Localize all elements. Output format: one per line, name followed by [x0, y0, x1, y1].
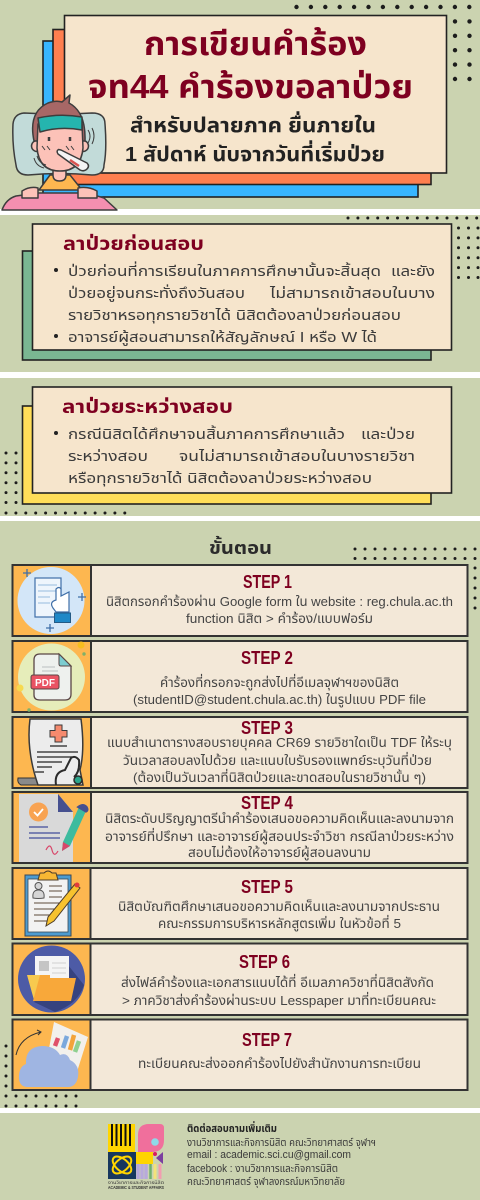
bullet list: จนไม่สามารถเข้าสอบในบางรายวิชา	[179, 448, 415, 465]
panel: step 5	[12, 868, 468, 939]
bullet list: ป่วยอยู่จนกระทั่งถึงวันสอบ	[68, 284, 245, 302]
panel: step 7	[12, 1020, 468, 1090]
title: การเขียนคำร้อง	[144, 25, 367, 62]
hair	[33, 95, 85, 141]
panel: step 2	[12, 641, 468, 712]
worried eyes	[49, 137, 70, 141]
logo: academic and student affairs: ACADEMIC & STUDENT AFFAIRS	[108, 1185, 164, 1190]
blanket	[2, 193, 117, 210]
panel: step 6	[12, 944, 468, 1015]
step description: ทะเบียนคณะส่งออกคำร้องไปยังสำนักงานการทะเบียน	[138, 1056, 421, 1071]
icon: clipboard and pencil	[25, 871, 80, 936]
bullet list: และยัง	[391, 264, 435, 280]
panel: header title card	[43, 16, 446, 197]
bullet list: ระหว่างสอบ	[68, 448, 148, 465]
ears	[32, 140, 42, 152]
step title: STEP 2	[241, 648, 293, 668]
step description	[106, 594, 453, 626]
title	[88, 25, 413, 105]
step description: function นิสิต > คำร้อง/แบบฟอร์ม	[186, 611, 373, 626]
title: จท44 คำร้องขอลาป่วย	[88, 68, 413, 105]
panel: step 4	[12, 792, 468, 863]
cheek marks	[42, 146, 74, 150]
bullet list: และป่วย	[361, 426, 415, 443]
step description: นิสิตระดับปริญญาตรีนำคำร้องเสนอขอความคิดเห็นและลงนามจาก	[105, 811, 454, 826]
step description: วันเวลาสอบลงไปด้วย และแนบใบรับรองแพทย์ระบุวันที่ป่วย	[123, 751, 432, 768]
blue back sheet	[43, 41, 418, 197]
step title: STEP 6	[239, 952, 290, 972]
footer contact text: email : academic.sci.cu@gmail.com	[187, 1149, 351, 1161]
panel: sick leave during exam	[22, 387, 452, 504]
bullet list: อาจารย์ผู้สอนสามารถให้สัญลักษณ์ I หรือ W ได้	[68, 330, 377, 346]
step title: STEP 4	[241, 793, 293, 813]
heading: ลาป่วยระหว่างสอบ	[62, 396, 233, 418]
panel: sick leave before exam	[22, 224, 452, 360]
shirt	[39, 175, 82, 190]
cream front sheet	[32, 224, 452, 350]
step description: คณะกรรมการบริหารหลักสูตรเพิ่ม ในหัวข้อที่ 5	[158, 914, 401, 931]
shiver marks	[88, 128, 94, 144]
forehead towel	[38, 115, 82, 132]
cream front sheet	[32, 387, 452, 493]
step description	[121, 973, 436, 1008]
icon: signed document and pen	[19, 794, 87, 862]
panel: step 1	[12, 565, 468, 636]
face	[37, 124, 83, 171]
step description: อาจารย์ที่ปรึกษา และอาจารย์ผู้สอนประจำวิชา กรณีลาป่วยระหว่าง	[105, 827, 454, 844]
step title: STEP 7	[242, 1030, 292, 1050]
bullet list: รายวิชาหรอทุกรายวิชาได้ นิสิตต้องลาป่วยก่อนสอบ	[68, 307, 401, 324]
footer contact text: งานวิชาการและกิจการนิสิต คณะวิทยาศาสตร์ จุฬาฯ	[187, 1137, 376, 1149]
step description: นิสิตกรอกคำร้องผ่าน Google form ใน website : reg.chula.ac.th	[106, 594, 453, 609]
step description	[118, 899, 440, 931]
bullet list	[54, 261, 435, 346]
thermometer	[57, 150, 88, 171]
orange back sheet	[53, 30, 431, 184]
bullet list: ไม่สามารถเข้าสอบในบาง	[269, 285, 435, 302]
step description: (studentID@student.chula.ac.th) ในรูปแบบ PDF file	[133, 692, 426, 707]
subtitle: สำหรับปลายภาค ยื่นภายใน	[130, 111, 376, 137]
step title: STEP 1	[243, 572, 292, 592]
step description: นิสิตบัณฑิตศึกษาเสนอขอความคิดเห็นและลงนามจากประธาน	[118, 899, 440, 914]
bullet list: ป่วยก่อนที่การเรียนในภาคการศึกษานั้นจะสิ้นสุด	[68, 261, 381, 280]
cream front sheet	[64, 16, 446, 173]
right hand	[78, 187, 97, 198]
footer contact text: ติดต่อสอบถามเพิ่มเติม	[187, 1121, 277, 1135]
logo: academic and student affairs: งานวิชาการและกิจการนิสิต	[108, 1180, 164, 1185]
step description: สอบไม่ต้องให้อาจารย์ผู้สอนลงนาม	[188, 845, 371, 860]
bullet list	[54, 425, 415, 487]
step description: ส่งไฟล์คำร้องและเอกสารแนบได้ที่ อีเมลภาควิชาที่นิสิตสังกัด	[121, 973, 434, 990]
bullet list: หรือทุกรายวิชาได้ นิสิตต้องลาป่วยระหว่างสอบ	[68, 470, 372, 487]
step description	[107, 735, 452, 785]
pillow	[13, 113, 106, 175]
step description: คำร้องที่กรอกจะถูกส่งไปที่อีเมลจุฬาฯของนิสิต	[160, 673, 399, 690]
footer contact text: คณะวิทยาศาสตร์ จุฬาลงกรณ์มหาวิทยาลัย	[187, 1176, 345, 1188]
heading: steps: ขั้นตอน	[209, 536, 272, 558]
step description	[133, 673, 426, 707]
step description	[105, 811, 454, 860]
green back sheet	[22, 251, 431, 360]
icon: PDF file: PDF	[35, 678, 55, 689]
footer contact text: facebook : งานวิชาการและกิจการนิสิต	[187, 1163, 338, 1175]
left hand	[22, 187, 38, 198]
icon: form and pointing hand	[18, 567, 86, 634]
heading: ลาป่วยก่อนสอบ	[63, 233, 204, 255]
yellow back sheet	[22, 406, 431, 504]
step description: (ต้องเป็นวันเวลาที่นิสิตป่วยและขาดสอบในรายวิชานั้น ๆ)	[133, 768, 426, 785]
bullet list: กรณีนิสิตได้ศึกษาจนสิ้นภาคการศึกษาแล้ว	[68, 425, 345, 443]
icon: sick person in bed with thermometer	[2, 95, 117, 210]
logo: academic and student affairs	[108, 1124, 164, 1190]
step title: STEP 5	[241, 877, 293, 897]
icon: folder with documents	[18, 946, 85, 1012]
step description: แนบสำเนาตารางสอบรายบุคคล CR69 รายวิชาใดเป็น TDF ให้ระบุ	[107, 735, 452, 750]
icon: medical certificate and stethoscope	[18, 719, 83, 785]
neck	[53, 165, 66, 181]
footer contact text	[187, 1121, 376, 1188]
step description: > ภาควิชาส่งคำร้องผ่านระบบ Lesspaper มาที่ทะเบียนคณะ	[122, 991, 436, 1008]
subtitle: 1 สัปดาห์ นับจากวันที่เริ่มป่วย	[125, 140, 385, 166]
icon: PDF file	[16, 642, 86, 712]
icon: cloud with chart report	[16, 1022, 88, 1087]
panel: step 3	[12, 717, 468, 788]
step title: STEP 3	[241, 718, 293, 738]
subtitle	[125, 111, 385, 166]
